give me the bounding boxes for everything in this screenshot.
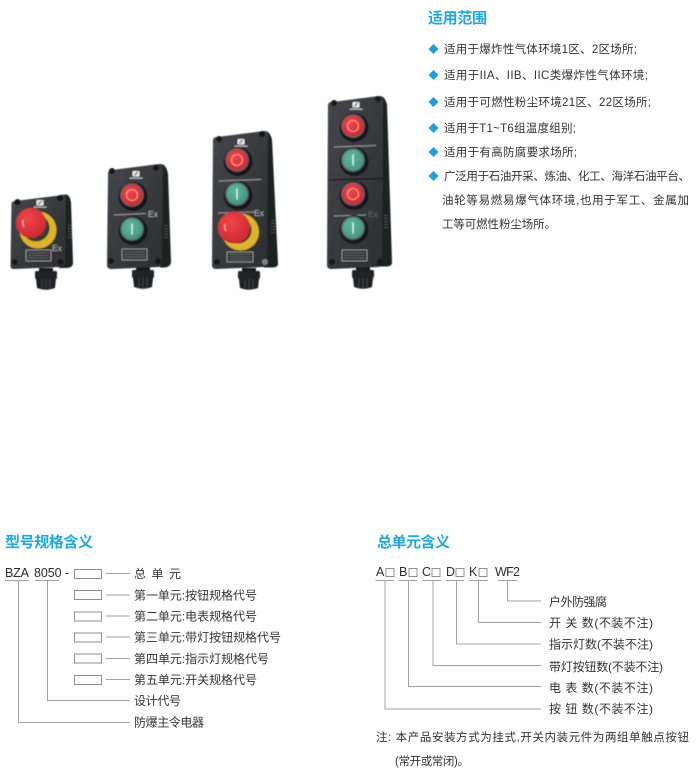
unit rows: 第三单元:带灯按钮规格代号 [134, 630, 281, 644]
unit rows: 第二单元:电表规格代号 [134, 608, 257, 624]
bullet 6 [428, 169, 690, 231]
device: four button box: Ex [368, 209, 379, 219]
bullet 5: 适用于有高防腐要求场所; [444, 145, 577, 159]
bullet 2: 适用于IIA、IIB、IIC类爆炸性气体环境; [444, 68, 648, 82]
product photos [10, 96, 392, 290]
code row: D [446, 565, 455, 579]
bullet 6: 工等可燃性粉尘场所。 [442, 217, 556, 231]
leader lines [376, 580, 541, 709]
labels: 指示灯数(不装不注) [549, 636, 653, 652]
code row: C [422, 565, 431, 579]
device: three position box with emergency stop: Ex [254, 208, 265, 218]
code row: WF2 [495, 565, 520, 579]
label: design code: 设计代号 [134, 694, 181, 708]
diagram: model specification [5, 566, 281, 730]
unit rows [74, 567, 281, 687]
device: four button box [327, 96, 392, 289]
note [376, 730, 690, 768]
unit rows: 第四单元:指示灯规格代号 [134, 651, 269, 666]
device: three position box with emergency stop [212, 131, 278, 290]
heading: scope of application: 适用范围 [428, 10, 487, 27]
unit rows: 总 单 元 [134, 567, 181, 581]
leader lines [5, 580, 130, 722]
diagram: total unit [376, 565, 690, 768]
labels [549, 594, 663, 716]
unit rows: 第五单元:开关规格代号 [134, 672, 257, 687]
device: emergency stop box: Ex [52, 243, 63, 253]
note: 注: 本产品安装方式为挂式,开关内装元件为两组单触点按钮 [376, 730, 690, 744]
model code: 8050 - [34, 566, 69, 580]
labels: 按 钮 数(不装不注) [549, 701, 653, 716]
label: explosion-proof master control: 防爆主令电器 [134, 714, 204, 730]
labels: 户外防强腐 [549, 594, 607, 609]
note: (常开或常闭)。 [395, 755, 469, 768]
model code: BZA [5, 566, 30, 580]
code row: A [376, 565, 385, 579]
code row: B [399, 565, 407, 579]
heading: total unit meaning: 总单元含义 [377, 533, 450, 551]
code row: K [469, 565, 478, 579]
bullet 6: 广泛用于石油开采、炼油、化工、海洋石油平台、 [444, 169, 690, 183]
device: two button box: Ex [148, 209, 159, 219]
unit rows: 第一单元:按钮规格代号 [134, 588, 257, 602]
device: two button box [107, 164, 171, 289]
bullet 1: 适用于爆炸性气体环境1区、2区场所; [444, 42, 637, 56]
model code [5, 566, 69, 580]
labels: 电 表 数(不装不注) [549, 680, 653, 695]
code row [376, 565, 520, 579]
bullet 4: 适用于T1~T6组温度组别; [444, 121, 576, 135]
heading: model specification meaning: 型号规格含义 [5, 533, 93, 551]
bullet 3: 适用于可燃性粉尘环境21区、22区场所; [444, 95, 651, 109]
list: scope of application [428, 42, 690, 231]
labels: 开 关 数(不装不注) [549, 615, 653, 630]
device: emergency stop box [10, 194, 73, 290]
labels: 带灯按钮数(不装不注) [549, 659, 663, 674]
bullet 6: 油轮等易燃易爆气体环境,也用于军工、金属加 [442, 193, 689, 207]
